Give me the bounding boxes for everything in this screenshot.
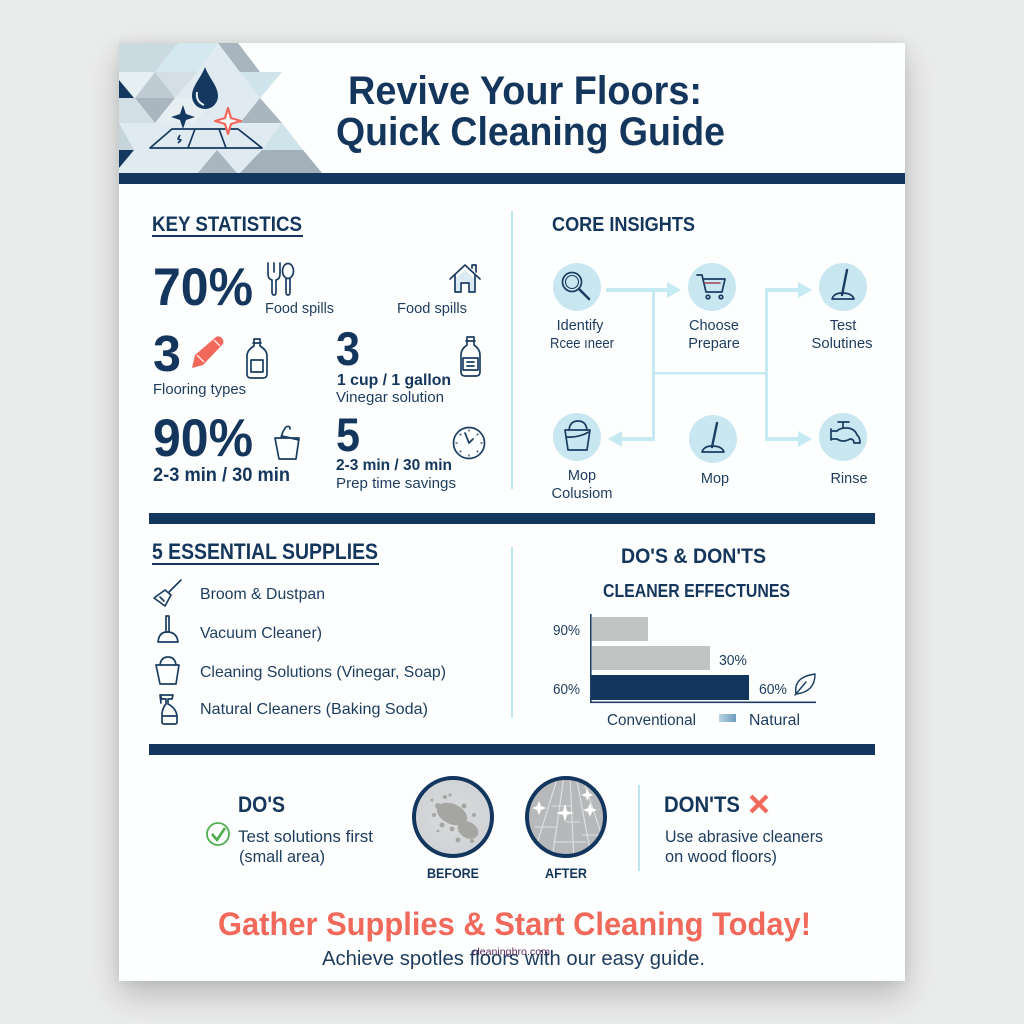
stat: 5 prep time savings bbox=[336, 408, 484, 492]
icon: leaf bbox=[795, 674, 815, 695]
item: cleaning solutions bbox=[156, 657, 446, 684]
stat: second food spills with house bbox=[397, 265, 480, 317]
title: Revive Your Floors: bbox=[348, 69, 702, 113]
step: identify: Identify bbox=[557, 318, 604, 334]
chart legend: Natural bbox=[749, 712, 800, 729]
step: test solutions bbox=[812, 263, 872, 352]
divider rule lower bbox=[149, 744, 875, 755]
header rule bbox=[119, 173, 905, 184]
item: broom and dustpan: Broom & Dustpan bbox=[200, 586, 325, 603]
icon: floor tiles bbox=[150, 129, 262, 148]
step: mop bbox=[689, 415, 737, 487]
chart legend bbox=[607, 712, 800, 729]
after circle: AFTER bbox=[545, 865, 587, 881]
before circle: BEFORE bbox=[427, 865, 479, 881]
stat: 5 prep time savings: 5 bbox=[336, 408, 360, 461]
stat: 3 flooring types: Flooring types bbox=[153, 381, 246, 398]
icon: navy sparkle bbox=[171, 105, 195, 129]
flow arrows bbox=[606, 282, 812, 447]
panel: don'ts: DON'TS bbox=[664, 792, 740, 817]
stat: 70% food spills bbox=[153, 258, 334, 317]
heading: core insights: CORE INSIGHTS bbox=[552, 214, 695, 236]
icon: house bbox=[450, 265, 480, 292]
bar chart: 60% bbox=[759, 682, 787, 698]
panel: core insights flow bbox=[550, 214, 872, 502]
after circle bbox=[527, 776, 610, 881]
panel: essential supplies bbox=[152, 539, 446, 724]
icon: cross bbox=[751, 796, 767, 812]
item: cleaning solutions: Cleaning Solutions (Vinegar, Soap) bbox=[200, 664, 446, 681]
bar chart: 30% bbox=[719, 653, 747, 669]
call to action: cleaningbro.com bbox=[472, 946, 550, 958]
page sheet bbox=[119, 43, 905, 981]
heading: key statistics: KEY STATISTICS bbox=[152, 213, 302, 236]
title: Quick Cleaning Guide bbox=[336, 110, 725, 154]
icon: clock bbox=[454, 428, 484, 458]
stat: 70% food spills: 70% bbox=[153, 258, 253, 317]
panel: do's bbox=[207, 792, 373, 866]
icon: bucket bbox=[275, 426, 299, 459]
stat: 90% time: 2-3 min / 30 min bbox=[153, 465, 290, 486]
title bbox=[336, 69, 725, 154]
call to action: Achieve spotles floors with our easy guide. bbox=[322, 947, 705, 970]
heading: essential supplies: 5 ESSENTIAL SUPPLIES bbox=[152, 539, 378, 564]
icon: check mark bbox=[207, 823, 229, 845]
step: test solutions: Solutines bbox=[812, 336, 872, 352]
step: rinse bbox=[819, 413, 868, 487]
column divider lower bbox=[511, 547, 513, 718]
panel: don'ts: Use abrasive cleaners bbox=[665, 828, 823, 846]
divider don'ts bbox=[638, 785, 640, 871]
panel: do's: (small area) bbox=[239, 848, 325, 866]
stat: second food spills with house: Food spills bbox=[397, 300, 467, 317]
bar chart bbox=[553, 614, 816, 703]
step: mop solution: Mop bbox=[568, 468, 596, 484]
icon: water drop bbox=[192, 67, 218, 109]
step: identify bbox=[550, 263, 614, 352]
step: choose prepare: Choose bbox=[689, 318, 739, 334]
item: vacuum cleaner bbox=[158, 616, 322, 642]
step: choose prepare: Prepare bbox=[688, 336, 740, 352]
header banner: geometric triangles with water drop and floor icon bbox=[119, 43, 322, 173]
step: mop solution: Colusiom bbox=[552, 486, 612, 502]
item: natural cleaners: Natural Cleaners (Baking Soda) bbox=[200, 701, 428, 718]
stat: 70% food spills: Food spills bbox=[265, 300, 334, 317]
call to action bbox=[218, 906, 811, 970]
step: identify: Rcee ıneer bbox=[550, 336, 614, 352]
step: mop: Mop bbox=[701, 471, 729, 487]
icon: pencil bbox=[192, 336, 224, 368]
step: choose prepare bbox=[688, 263, 740, 352]
stat: 5 prep time savings: 2-3 min / 30 min bbox=[336, 457, 452, 474]
stat: 3 vinegar solution: 1 cup / 1 gallon bbox=[337, 372, 451, 389]
icon: coral sparkle bbox=[215, 108, 241, 134]
icon: bottle bbox=[247, 339, 267, 378]
divider rule middle bbox=[149, 513, 875, 524]
step: test solutions: Test bbox=[830, 318, 856, 334]
bar chart: 90% bbox=[553, 623, 580, 639]
stat: 3 vinegar solution: 3 bbox=[336, 322, 360, 375]
stat: 90% time: 90% bbox=[153, 409, 253, 468]
panel: do's: Test solutions first bbox=[238, 828, 373, 846]
bar chart: 60% bbox=[553, 682, 580, 698]
item: broom and dustpan bbox=[154, 580, 325, 606]
stat: 3 flooring types: 3 bbox=[153, 325, 181, 382]
chart legend: Conventional bbox=[607, 712, 696, 729]
panel: don'ts bbox=[664, 792, 823, 866]
before circle bbox=[414, 778, 492, 881]
heading: do's and don'ts: DO'S & DON'TS bbox=[621, 545, 766, 568]
icon: labelled bottle bbox=[461, 337, 480, 376]
item: natural cleaners bbox=[160, 695, 428, 724]
stat: 3 vinegar solution bbox=[336, 322, 480, 406]
panel: do's: DO'S bbox=[238, 792, 285, 817]
icon: fork and spoon bbox=[268, 263, 294, 295]
stat: 5 prep time savings: Prep time savings bbox=[336, 475, 456, 492]
stat: 90% time bbox=[153, 409, 299, 486]
column divider top bbox=[511, 211, 513, 489]
chart title: CLEANER EFFECTUNES bbox=[603, 581, 790, 601]
stat: 3 vinegar solution: Vinegar solution bbox=[336, 389, 444, 406]
panel: key statistics bbox=[152, 213, 484, 492]
stat: 3 flooring types bbox=[153, 325, 267, 398]
panel: cleaner effectiveness chart bbox=[553, 545, 816, 729]
step: rinse: Rinse bbox=[830, 471, 868, 487]
panel: don'ts: on wood floors) bbox=[665, 848, 777, 866]
step: mop solution bbox=[552, 413, 612, 502]
item: vacuum cleaner: Vacuum Cleaner) bbox=[200, 625, 322, 642]
call to action: Gather Supplies & Start Cleaning Today! bbox=[218, 906, 811, 942]
